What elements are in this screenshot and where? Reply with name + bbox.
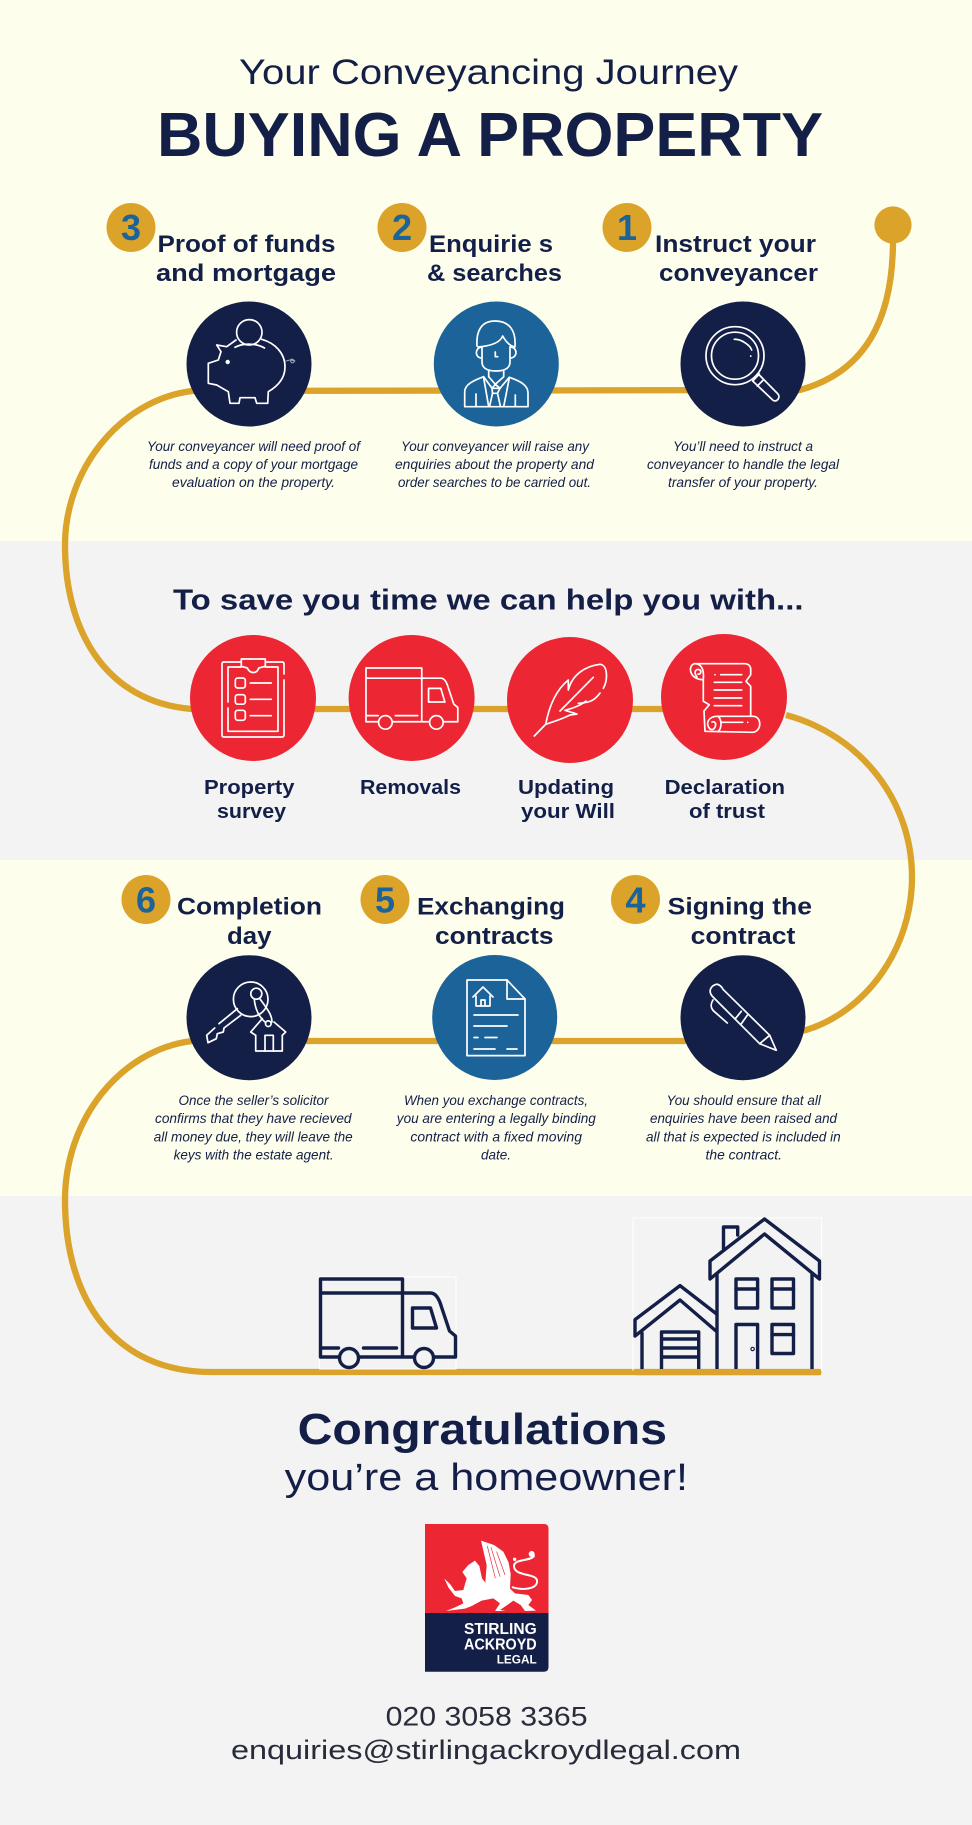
step 3 badge xyxy=(106,203,156,252)
step 6 heading: Completion xyxy=(177,894,322,921)
griffin emblem xyxy=(444,1541,537,1611)
step 4 text: enquiries have been raised and xyxy=(650,1110,838,1126)
step 1 text: transfer of your property. xyxy=(668,474,818,490)
step 5 text xyxy=(396,1092,596,1162)
step 2 text: enquiries about the property and xyxy=(395,456,595,472)
icon: removals truck xyxy=(349,635,475,761)
step 1 text: conveyancer to handle the legal xyxy=(647,456,840,472)
logo wordmark: STIRLING xyxy=(464,1621,537,1638)
step 1 badge xyxy=(602,203,652,252)
contact details: enquiries@stirlingackroydlegal.com xyxy=(231,1735,741,1765)
icon: house keys xyxy=(186,955,312,1080)
step 6 badge: 6 xyxy=(136,880,156,920)
congratulations message: Congratulations xyxy=(298,1405,667,1454)
step 5 badge: 5 xyxy=(375,880,395,920)
label: declaration of trust: Declaration xyxy=(665,777,785,799)
label: declaration of trust xyxy=(665,777,785,823)
congratulations message: you’re a homeowner! xyxy=(285,1457,688,1499)
step 4 heading: contract xyxy=(691,923,795,950)
logo wordmark: ACKROYD xyxy=(464,1636,537,1653)
label: property survey: survey xyxy=(217,801,287,823)
step 5 text: date. xyxy=(481,1146,511,1162)
icon: person in suit xyxy=(434,302,559,426)
step 1 heading: conveyancer xyxy=(659,260,818,287)
step 1 text xyxy=(647,438,840,490)
label: property survey xyxy=(204,777,295,823)
step 3 text xyxy=(147,438,362,490)
step 6 heading: day xyxy=(227,923,272,950)
step 6 text xyxy=(154,1092,353,1162)
icon: pen xyxy=(680,955,806,1080)
step 4 text: the contract. xyxy=(706,1146,782,1162)
step 6 heading xyxy=(177,894,322,950)
step 5 text: you are entering a legally binding xyxy=(396,1110,596,1126)
label: updating your will xyxy=(518,777,615,823)
icon: scroll xyxy=(661,634,787,760)
step 2 heading: Enquirie s xyxy=(429,231,553,258)
step 4 text: You should ensure that all xyxy=(666,1092,822,1108)
logo wordmark: LEGAL xyxy=(497,1652,537,1666)
panel: steps 4 to 6 xyxy=(122,875,841,1162)
step 6 text: Once the seller’s solicitor xyxy=(178,1092,330,1108)
step 3 heading: and mortgage xyxy=(156,260,336,287)
label: declaration of trust: of trust xyxy=(689,801,765,823)
step 6 text: all money due, they will leave the xyxy=(154,1128,353,1144)
journey path xyxy=(65,206,912,1372)
panel: steps 1 to 3 xyxy=(106,203,840,490)
step 2 text: order searches to be carried out. xyxy=(398,474,591,490)
title xyxy=(157,53,823,170)
step 5 heading: Exchanging xyxy=(417,894,565,921)
step 2 badge: 2 xyxy=(392,207,412,248)
step 4 text xyxy=(646,1092,841,1162)
icon: contract document xyxy=(432,955,557,1080)
step 1 heading: Instruct your xyxy=(655,231,816,258)
step 6 text: keys with the estate agent. xyxy=(174,1146,334,1162)
step 6 badge xyxy=(122,875,170,924)
icon: piggy bank xyxy=(186,302,312,426)
step 4 text: all that is expected is included in xyxy=(646,1128,841,1144)
logo wordmark xyxy=(464,1621,537,1666)
step 3 heading: Proof of funds xyxy=(158,231,336,258)
step 1 badge: 1 xyxy=(617,207,637,248)
label: updating your will: your Will xyxy=(521,801,615,823)
step 5 text: When you exchange contracts, xyxy=(404,1092,588,1108)
title: BUYING A PROPERTY xyxy=(157,101,823,170)
label: updating your will: Updating xyxy=(518,777,614,799)
heading: To save you time we can help you with... xyxy=(173,584,804,616)
icon: magnifying glass xyxy=(680,302,806,426)
step 5 heading xyxy=(417,894,565,950)
step 2 heading: & searches xyxy=(427,260,562,287)
step 1 heading xyxy=(655,231,818,287)
step 3 text: evaluation on the property. xyxy=(172,474,335,490)
icon: house xyxy=(633,1218,822,1375)
step 2 heading xyxy=(427,231,562,287)
step 4 heading xyxy=(668,894,812,950)
step 2 text xyxy=(395,438,595,490)
step 3 text: Your conveyancer will need proof of xyxy=(147,438,362,454)
step 3 badge: 3 xyxy=(121,207,141,248)
step 4 heading: Signing the xyxy=(668,894,812,921)
step 2 text: Your conveyancer will raise any xyxy=(401,438,590,454)
label: property survey: Property xyxy=(204,777,295,799)
step 1 text: You’ll need to instruct a xyxy=(673,438,813,454)
icon: clipboard checklist xyxy=(190,635,316,761)
title: Your Conveyancing Journey xyxy=(239,53,739,92)
step 4 badge xyxy=(611,875,660,924)
panel: extra services xyxy=(173,584,804,823)
icon: quill xyxy=(507,637,633,763)
contact details: 020 3058 3365 xyxy=(386,1701,588,1731)
step 6 text: confirms that they have recieved xyxy=(155,1110,353,1126)
step 3 heading xyxy=(156,231,336,287)
congratulations message xyxy=(285,1405,688,1499)
icon: moving truck xyxy=(320,1277,456,1369)
step 3 text: funds and a copy of your mortgage xyxy=(149,456,358,472)
step 5 badge xyxy=(360,875,410,924)
step 4 badge: 4 xyxy=(625,880,646,920)
contact details xyxy=(231,1701,741,1765)
step 5 heading: contracts xyxy=(435,923,554,950)
label: removals: Removals xyxy=(360,777,461,799)
logo xyxy=(425,1524,548,1672)
step 2 badge xyxy=(378,203,426,252)
step 5 text: contract with a fixed moving xyxy=(410,1128,582,1144)
